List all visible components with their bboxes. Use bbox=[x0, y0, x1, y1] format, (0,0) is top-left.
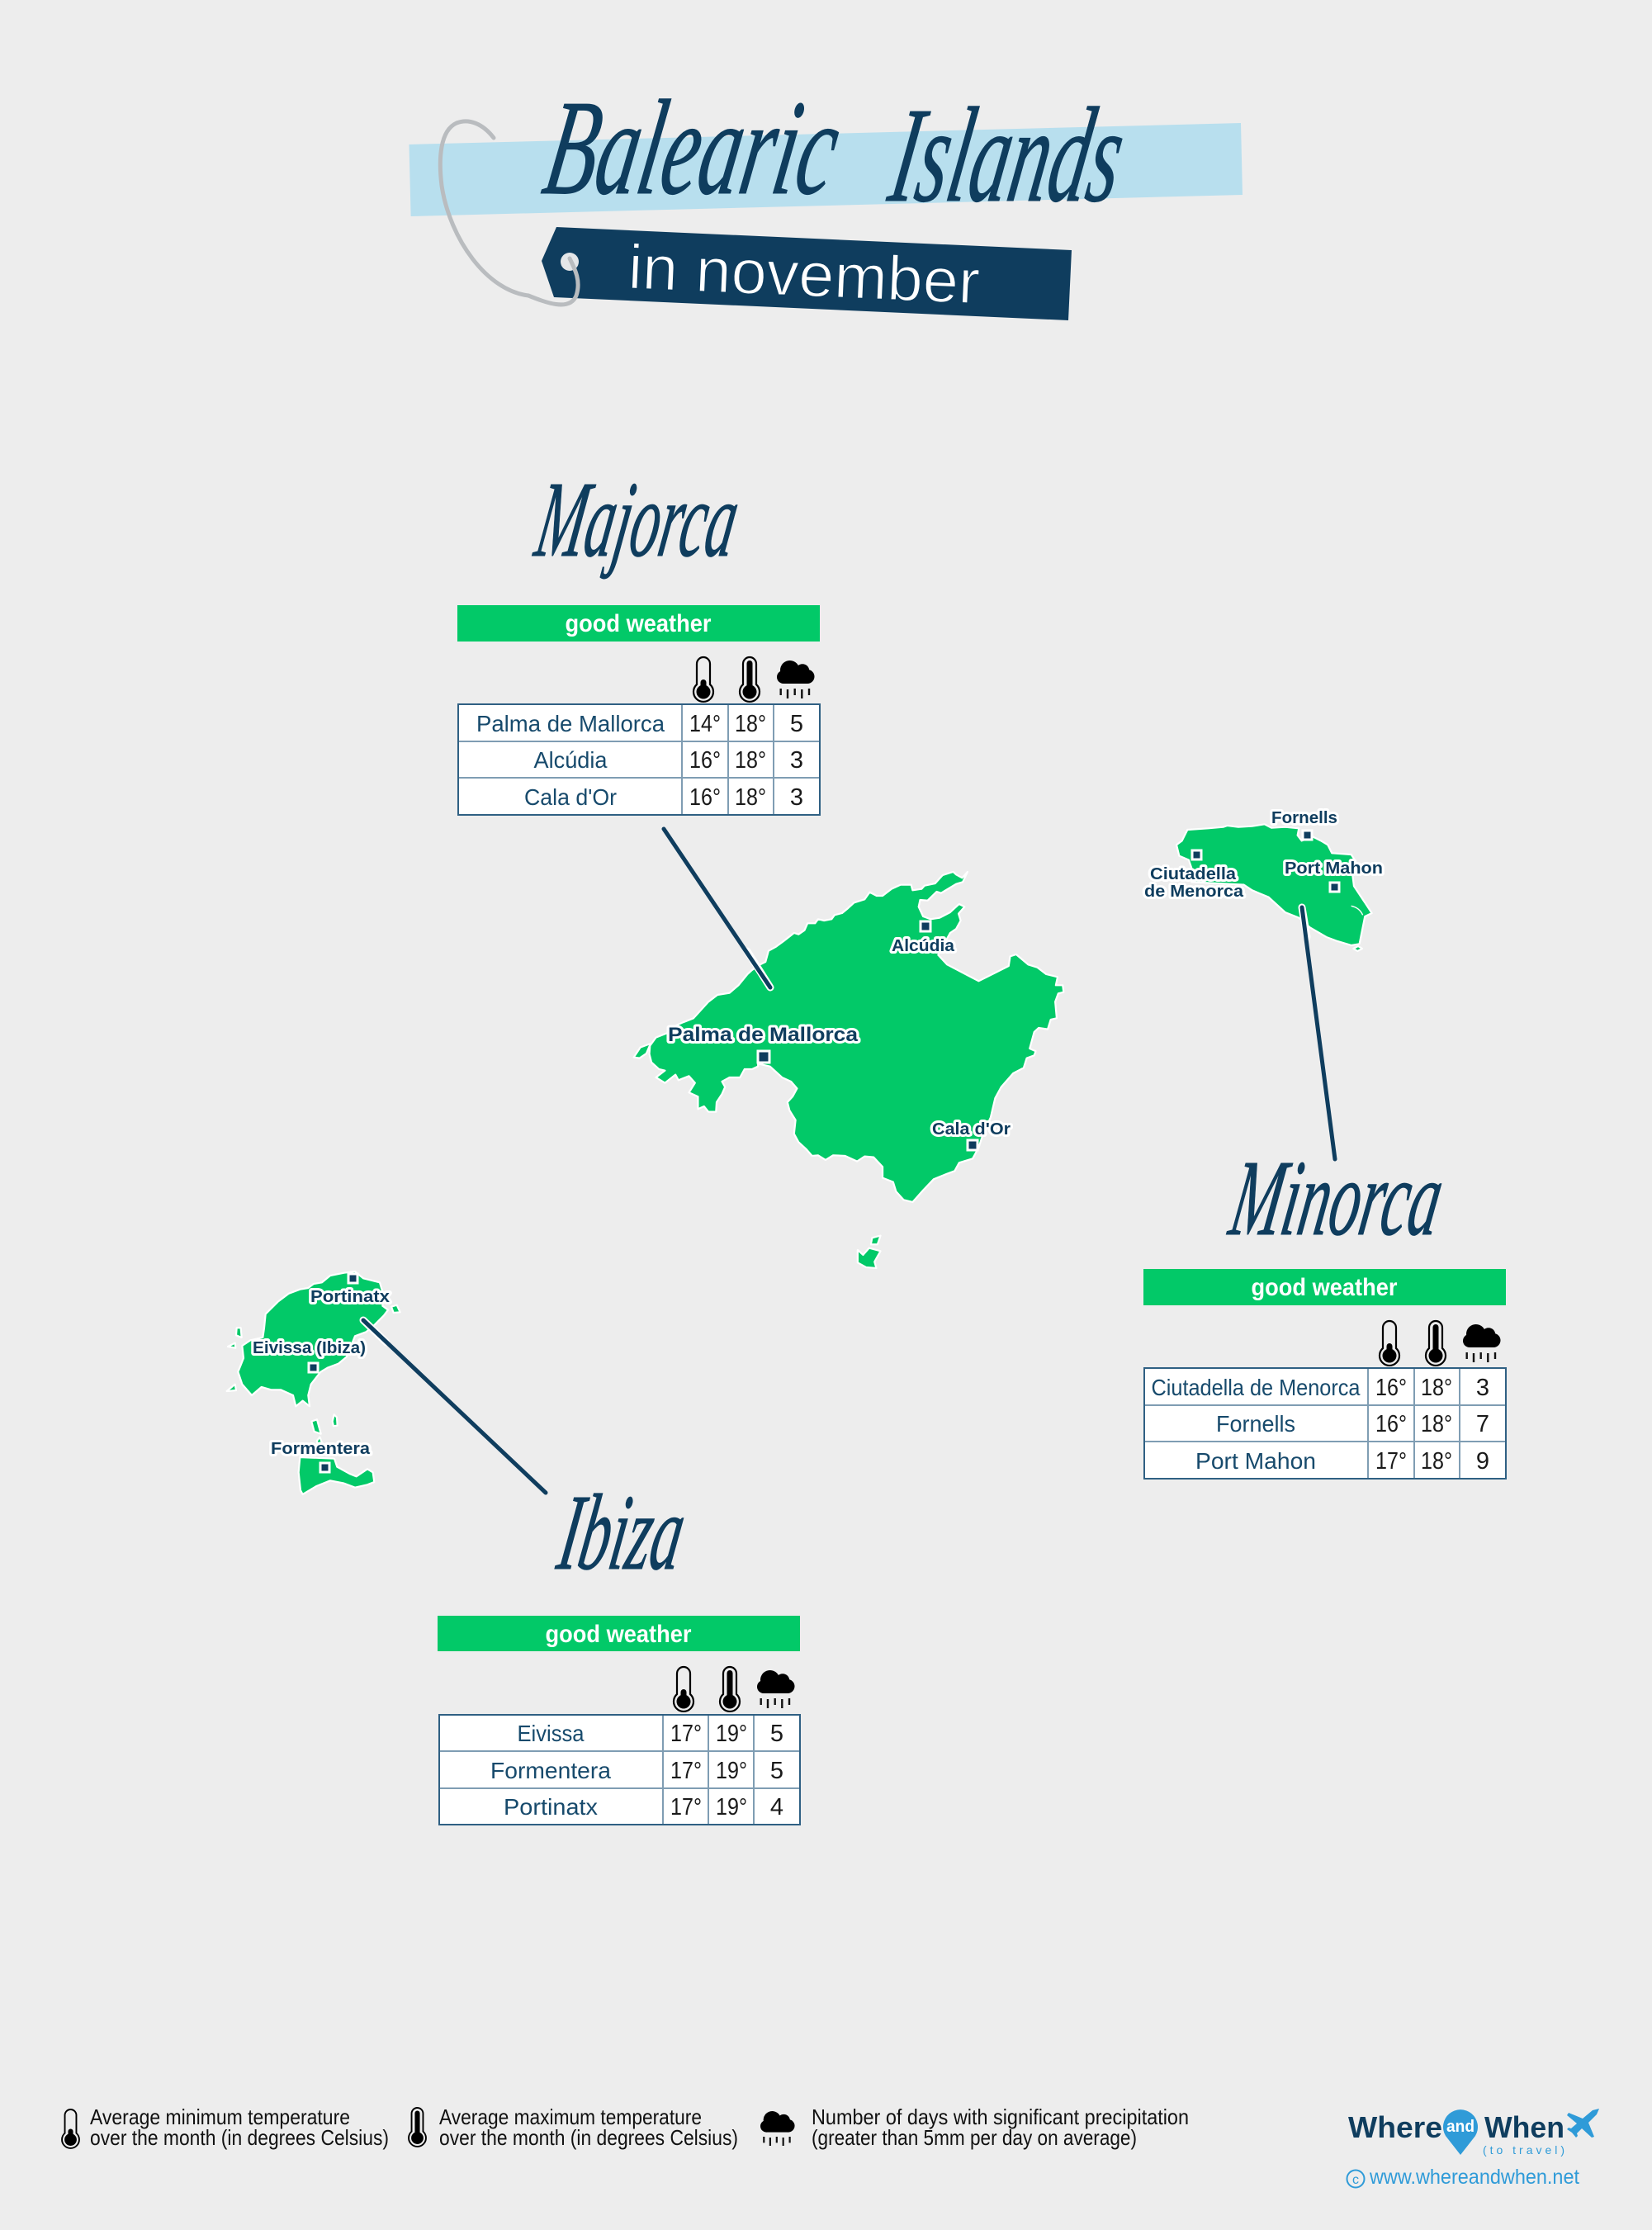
legend: precipitation: Number of days with significant precipitation bbox=[812, 2105, 1189, 2129]
map: Ibiza bbox=[227, 1271, 546, 1494]
icon: map pin bbox=[1443, 2109, 1478, 2155]
leader line: Ibiza bbox=[363, 1320, 546, 1493]
city: Ciutadella de Menorca: de Menorca bbox=[1144, 883, 1244, 901]
legend: precipitation: (greater than 5mm per day on average) bbox=[812, 2125, 1137, 2150]
table: Majorca: Cala d'Or bbox=[524, 784, 617, 810]
table: Minorca: 16° bbox=[1375, 1411, 1407, 1437]
table: Minorca: Ciutadella de Menorca bbox=[1151, 1375, 1361, 1400]
title band bbox=[409, 123, 1243, 216]
panel: Ibiza bbox=[438, 1472, 800, 1825]
city: Fornells bbox=[1271, 809, 1337, 840]
weather bar: good weather bbox=[565, 610, 712, 637]
heading: Ibiza: Ibiza bbox=[550, 1472, 694, 1592]
city: Formentera: Formentera bbox=[271, 1440, 371, 1458]
copyright and website: www.whereandwhen.net bbox=[1369, 2166, 1579, 2189]
city: Cala d'Or bbox=[932, 1120, 1011, 1150]
table: Majorca: 16° bbox=[689, 784, 721, 811]
table: Ibiza: 5 bbox=[770, 1758, 783, 1784]
logo wordmark: When: When bbox=[1484, 2110, 1564, 2144]
city: Alcúdia bbox=[892, 921, 955, 955]
tag string bbox=[440, 121, 578, 305]
map: Majorca bbox=[634, 829, 1063, 1268]
city: Formentera bbox=[271, 1440, 371, 1472]
table: Majorca: 3 bbox=[790, 784, 803, 811]
city: Port Mahon: Port Mahon bbox=[1285, 859, 1383, 878]
panel: Majorca bbox=[457, 459, 820, 815]
city: Palma de Mallorca: Palma de Mallorca bbox=[668, 1024, 859, 1046]
tag hole bbox=[561, 253, 579, 271]
city: Portinatx: Portinatx bbox=[310, 1288, 390, 1306]
table: Ibiza: 17° bbox=[670, 1794, 702, 1820]
table: Minorca bbox=[1144, 1368, 1506, 1479]
city: Eivissa (Ibiza) bbox=[253, 1339, 366, 1372]
table: Minorca: 16° bbox=[1375, 1375, 1407, 1401]
legend: minimum temperature: Average minimum temperature bbox=[90, 2105, 350, 2129]
icons bbox=[674, 1667, 794, 1712]
leader line: Minorca bbox=[1302, 907, 1335, 1159]
table: Ibiza: 19° bbox=[716, 1794, 747, 1820]
table: Ibiza: 19° bbox=[716, 1721, 747, 1747]
table: Minorca: 18° bbox=[1421, 1411, 1452, 1437]
subtitle: in november: in november bbox=[627, 232, 982, 318]
table: Minorca: Port Mahon bbox=[1195, 1448, 1316, 1474]
title block bbox=[409, 73, 1243, 320]
table: Minorca: 9 bbox=[1476, 1448, 1489, 1475]
title: Balearic Islands: Islands bbox=[880, 80, 1135, 230]
city: Alcúdia: Alcúdia bbox=[892, 937, 955, 955]
table: Ibiza: Formentera bbox=[490, 1758, 611, 1783]
legend: maximum temperature: Average maximum temperature bbox=[439, 2105, 702, 2129]
table: Ibiza: 5 bbox=[770, 1721, 783, 1747]
table: Minorca: Fornells bbox=[1216, 1411, 1295, 1437]
icon: airplane bbox=[1567, 2109, 1599, 2138]
icons bbox=[1380, 1321, 1501, 1366]
weather bar bbox=[438, 1616, 800, 1651]
table: Minorca: 7 bbox=[1476, 1411, 1489, 1437]
logo tagline: (to travel) bbox=[1483, 2143, 1564, 2157]
weather bar bbox=[1143, 1269, 1506, 1305]
luggage tag bbox=[542, 227, 1072, 320]
table: Ibiza: 17° bbox=[670, 1721, 702, 1747]
panel: Minorca bbox=[1143, 1138, 1506, 1479]
city: Portinatx bbox=[310, 1274, 390, 1306]
table: Majorca: 18° bbox=[735, 747, 766, 774]
legend: minimum temperature bbox=[62, 2105, 389, 2150]
city: Ciutadella de Menorca: Ciutadella bbox=[1150, 865, 1237, 883]
city: Port Mahon bbox=[1285, 859, 1383, 892]
island shapes: Majorca bbox=[634, 872, 1063, 1268]
legend: minimum temperature: over the month (in degrees Celsius) bbox=[90, 2125, 389, 2150]
table: Ibiza: 4 bbox=[770, 1794, 783, 1820]
icon: map pin: and bbox=[1446, 2118, 1474, 2136]
title: Balearic Islands: Balearic bbox=[535, 73, 850, 223]
city: Cala d'Or: Cala d'Or bbox=[932, 1120, 1011, 1139]
island shape: Minorca bbox=[1176, 824, 1372, 951]
city: Palma de Mallorca bbox=[668, 1024, 859, 1063]
logo wordmark: Where: Where bbox=[1348, 2110, 1442, 2144]
table: Ibiza: 19° bbox=[716, 1758, 747, 1784]
legend: maximum temperature bbox=[409, 2105, 738, 2150]
table: Majorca: Alcúdia bbox=[533, 747, 608, 773]
city: Eivissa (Ibiza): Eivissa (Ibiza) bbox=[253, 1339, 366, 1357]
map: Minorca bbox=[1144, 809, 1383, 1159]
table: Majorca bbox=[458, 704, 820, 815]
table: Majorca: Palma de Mallorca bbox=[476, 711, 665, 736]
city: Fornells: Fornells bbox=[1271, 809, 1337, 827]
table: Majorca: 18° bbox=[735, 784, 766, 811]
table: Minorca: 18° bbox=[1421, 1375, 1452, 1401]
weather bar: good weather bbox=[545, 1621, 692, 1648]
weather bar bbox=[457, 605, 820, 642]
legend: maximum temperature: over the month (in degrees Celsius) bbox=[439, 2125, 738, 2150]
logo bbox=[1347, 2109, 1599, 2189]
island shapes: Ibiza and Formentera bbox=[227, 1271, 400, 1494]
icons bbox=[693, 657, 814, 702]
legend bbox=[62, 2105, 1189, 2150]
table: Ibiza: Eivissa bbox=[517, 1721, 585, 1746]
city: Ciutadella de Menorca bbox=[1144, 850, 1244, 901]
table: Majorca: 5 bbox=[790, 711, 803, 737]
copyright and website: c bbox=[1352, 2173, 1359, 2187]
table: Minorca: 17° bbox=[1375, 1448, 1407, 1475]
table: Majorca: 3 bbox=[790, 747, 803, 774]
table: Ibiza bbox=[439, 1715, 800, 1825]
legend: precipitation bbox=[760, 2105, 1189, 2150]
table: Majorca: 14° bbox=[689, 711, 721, 737]
table: Minorca: 3 bbox=[1476, 1375, 1489, 1401]
table: Ibiza: Portinatx bbox=[504, 1794, 598, 1820]
heading: Minorca: Minorca bbox=[1222, 1138, 1452, 1257]
leader line: Majorca bbox=[664, 829, 770, 987]
table: Majorca: 16° bbox=[689, 747, 721, 774]
table: Minorca: 18° bbox=[1421, 1448, 1452, 1475]
weather bar: good weather bbox=[1252, 1274, 1398, 1301]
table: Ibiza: 17° bbox=[670, 1758, 702, 1784]
title: Balearic Islands bbox=[535, 73, 1135, 230]
heading: Majorca: Majorca bbox=[528, 459, 748, 579]
table: Majorca: 18° bbox=[735, 711, 766, 737]
